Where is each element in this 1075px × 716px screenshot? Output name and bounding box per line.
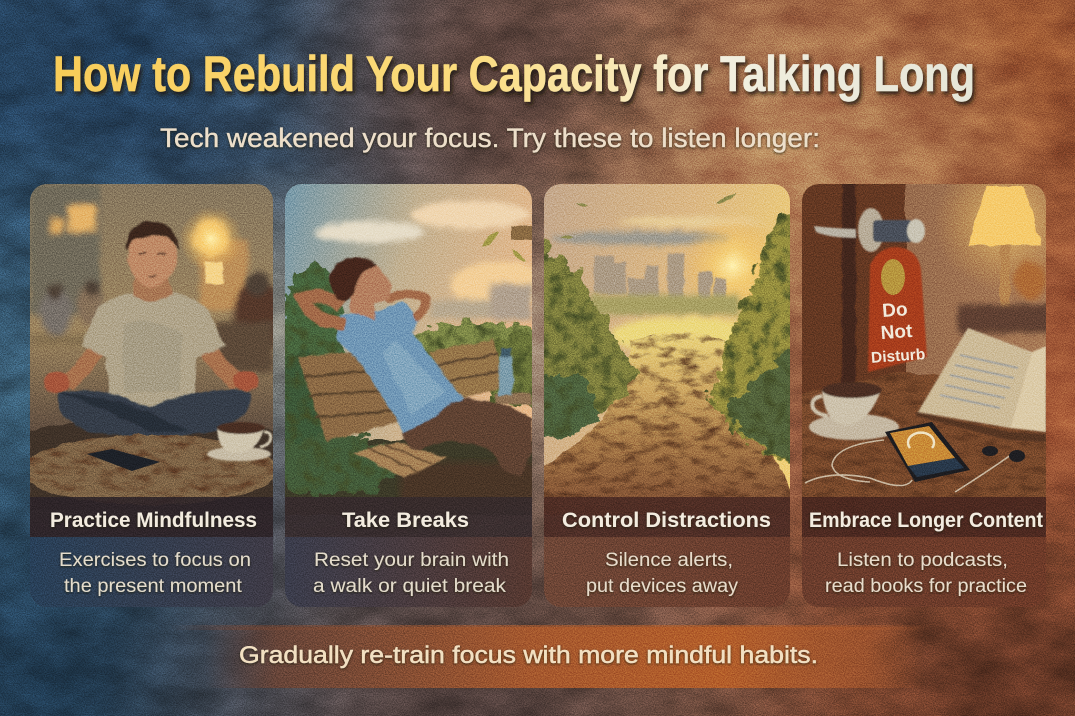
park bench (298, 340, 532, 478)
footer message: Gradually re-train focus with more mindful habits. (239, 642, 818, 669)
card text: embrace longer content (809, 509, 1043, 597)
wooden door (802, 184, 907, 394)
card text: control distractions: put devices away (586, 576, 739, 597)
man meditating (44, 221, 259, 408)
panel: practice mindfulness illustration (30, 184, 273, 607)
card text: embrace longer content: read books for practice (825, 576, 1027, 597)
man reclining (302, 257, 532, 476)
card text: control distractions (562, 509, 771, 597)
coffee cup and saucer (809, 382, 899, 440)
card text: take breaks: Reset your brain with (314, 550, 509, 571)
desk (802, 372, 1046, 497)
do not disturb door hanger: Disturb (870, 346, 926, 367)
coffee cup (207, 422, 271, 461)
card text: practice mindfulness: Exercises to focus on (59, 550, 251, 571)
card text: embrace longer content: Embrace Longer Content (809, 509, 1043, 532)
card text: take breaks (313, 509, 509, 597)
do not disturb door hanger: Do (882, 299, 908, 322)
card text: embrace longer content: Listen to podcasts, (837, 550, 1008, 571)
card text: control distractions: Silence alerts, (605, 550, 733, 571)
table lamp (968, 186, 1042, 315)
earbuds (982, 446, 1025, 462)
phone on table (87, 449, 160, 471)
bushes (536, 205, 798, 465)
panel: control distractions illustration (536, 176, 798, 607)
card text: control distractions: Control Distractions (562, 509, 771, 532)
earphone cable (805, 440, 1015, 492)
do not disturb door hanger (868, 247, 927, 372)
do not disturb door hanger: Not (880, 321, 914, 344)
open book (916, 328, 1046, 442)
card text: take breaks: a walk or quiet break (313, 576, 507, 597)
smartphone (885, 422, 970, 482)
subtitle: Tech weakened your focus. Try these to listen longer: (160, 123, 820, 153)
panel: take breaks illustration (285, 184, 532, 607)
card text: practice mindfulness (50, 509, 257, 597)
cafe table (22, 435, 278, 505)
card text: take breaks: Take Breaks (342, 509, 469, 532)
water bottle (499, 348, 513, 396)
distant city skyline (594, 254, 726, 300)
card text: practice mindfulness: the present moment (64, 576, 243, 597)
card text: practice mindfulness: Practice Mindfulness (50, 509, 257, 532)
bottom banner band (170, 625, 930, 688)
door handle (814, 208, 925, 252)
panel: embrace longer content illustration (802, 184, 1046, 607)
winding path (536, 332, 798, 515)
